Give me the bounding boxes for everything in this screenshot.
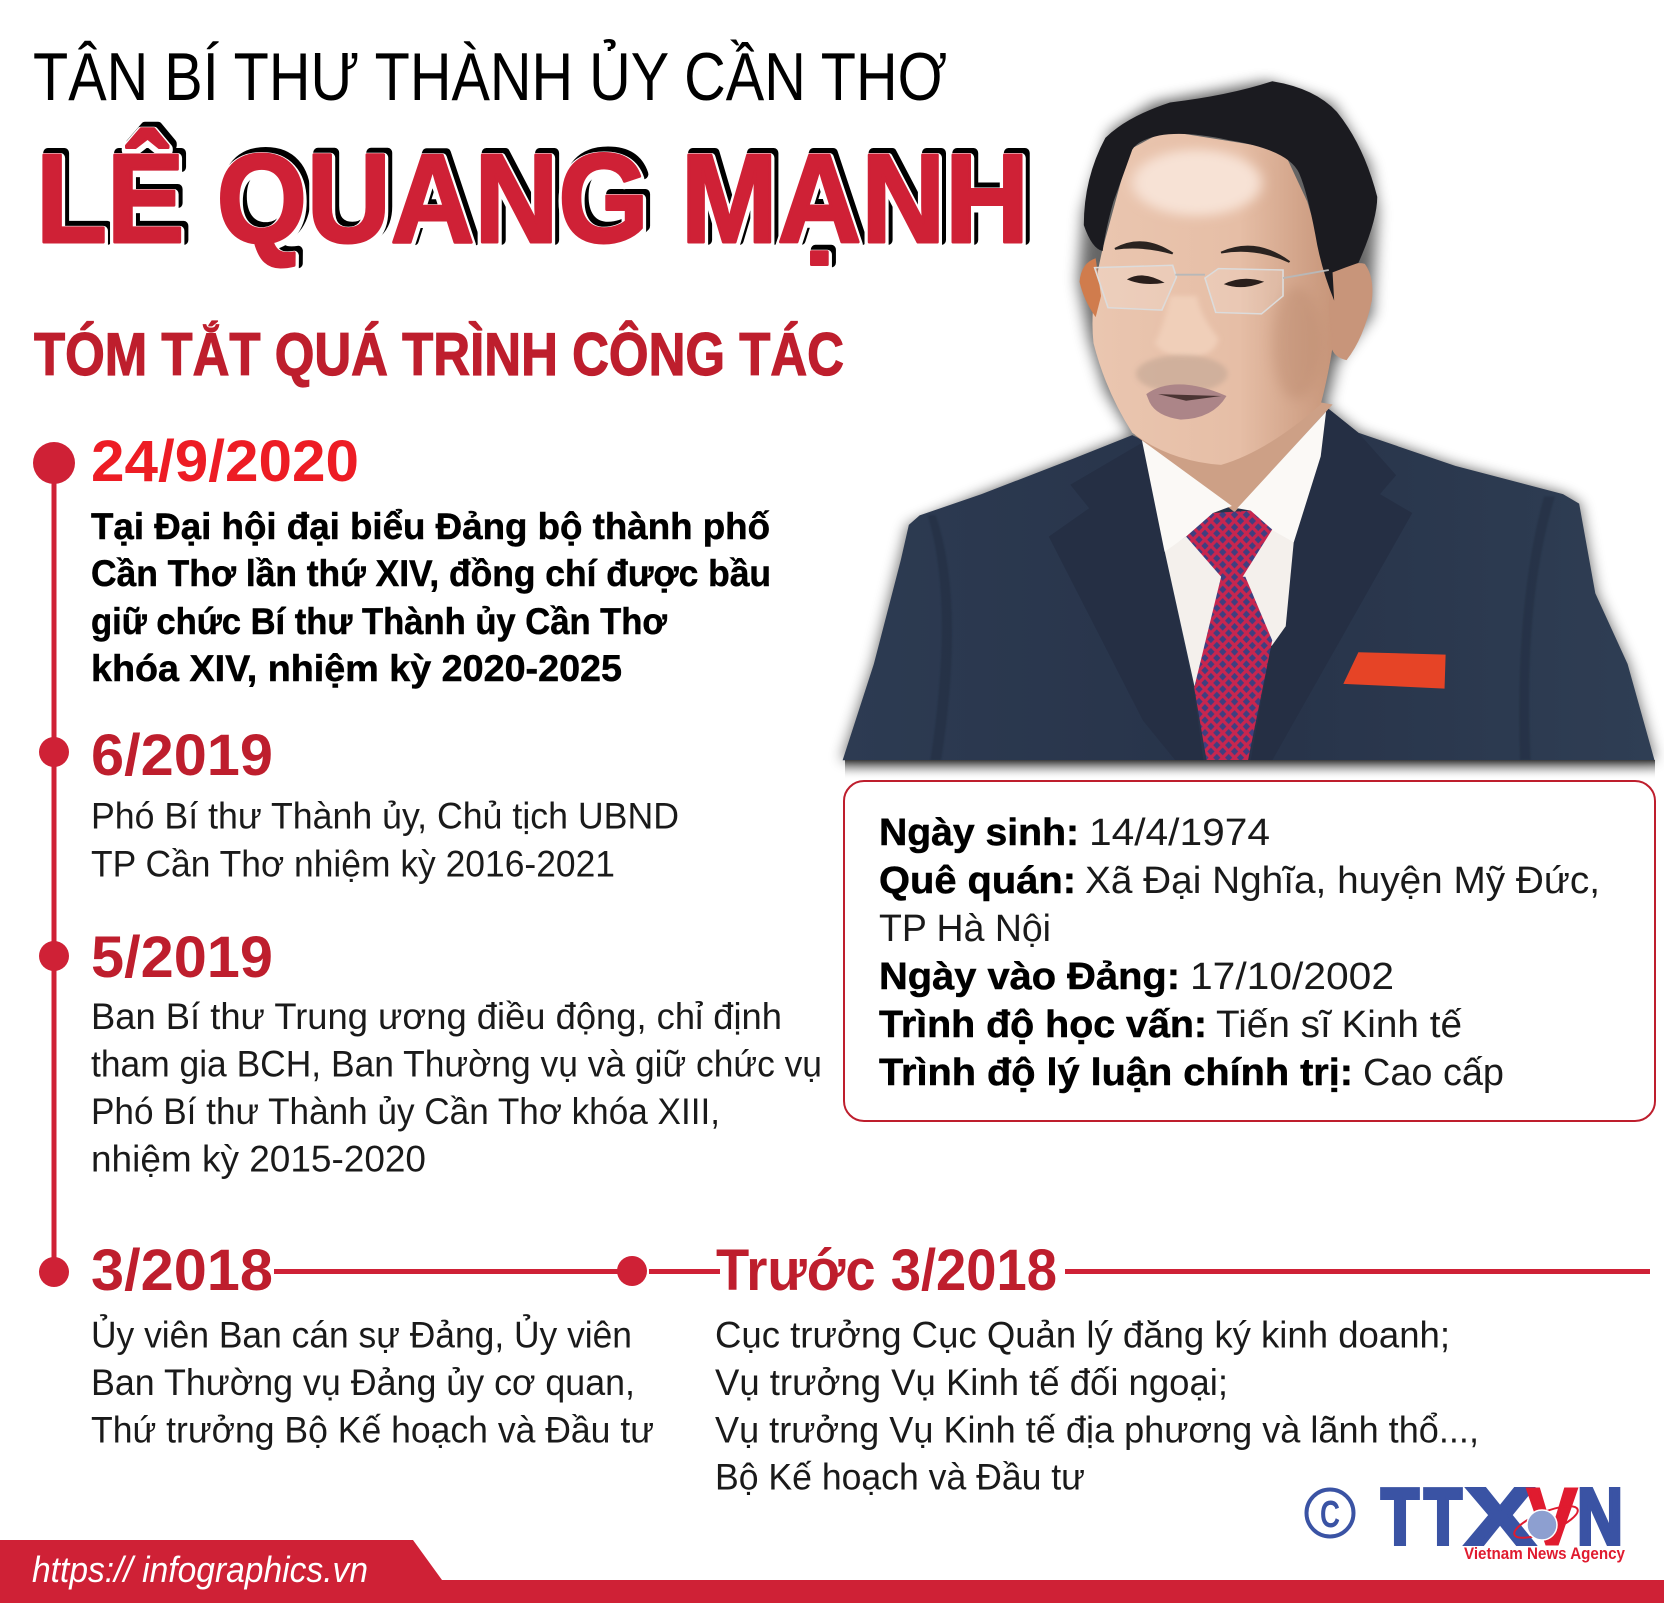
entry 24/9/2020: giữ chức Bí thư Thành ủy Cần Thơ: [91, 601, 668, 642]
entry before 3/2018: Vụ trưởng Vụ Kinh tế địa phương và lãnh thổ...,: [715, 1410, 1479, 1450]
TTXVN logo: T: [1381, 1472, 1419, 1561]
suit: [843, 407, 1655, 760]
info box: 17/10/2002: [1190, 956, 1394, 998]
entry 24/9/2020: [91, 429, 771, 689]
hair: [1084, 81, 1377, 301]
name heading: LÊ QUANG MẠNH: [36, 128, 1029, 269]
entry 24/9/2020: Tại Đại hội đại biểu Đảng bộ thành phố: [91, 506, 770, 547]
eyebrows: [1115, 242, 1289, 262]
nose: [1155, 296, 1218, 357]
entry 3/2018: Ủy viên Ban cán sự Đảng, Ủy viên: [91, 1314, 632, 1356]
timeline dot 5/2019: [39, 941, 69, 971]
forehead highlight: [1132, 150, 1261, 216]
entry 24/9/2020: 24/9/2020: [91, 429, 359, 494]
section heading: TÓM TẮT QUÁ TRÌNH CÔNG TÁC: [34, 321, 844, 388]
info box: Ngày vào Đảng:: [879, 956, 1180, 998]
copyright icon: C: [1320, 1494, 1340, 1536]
entry 5/2019: 5/2019: [91, 925, 273, 990]
badge: [1343, 652, 1446, 689]
photo bottom shadow: [845, 760, 1655, 780]
TTXVN logo: X: [1466, 1472, 1534, 1561]
shirt: [1165, 511, 1294, 697]
info box: Xã Đại Nghĩa, huyện Mỹ Đức,: [1085, 860, 1600, 902]
eyes: [1127, 275, 1264, 287]
mouth: [1146, 384, 1226, 420]
entry before 3/2018: Vụ trưởng Vụ Kinh tế đối ngoại;: [715, 1362, 1228, 1403]
entry 6/2019: Phó Bí thư Thành ủy, Chủ tịch UBND: [91, 796, 679, 836]
timeline dot 2020: [33, 442, 75, 484]
photo shadow: [843, 81, 1655, 760]
neck: [1135, 390, 1333, 512]
glasses: [1095, 265, 1329, 314]
info box: TP Hà Nội: [879, 908, 1051, 950]
face: [1092, 131, 1337, 465]
timeline dot 3/2018: [39, 1257, 69, 1287]
TTXVN logo: Vietnam News Agency: [1464, 1544, 1625, 1563]
entry before 3/2018: Trước 3/2018: [716, 1238, 1057, 1303]
name heading: LÊ QUANG MẠNH: [36, 131, 1029, 272]
entry 24/9/2020: khóa XIV, nhiệm kỳ 2020-2025: [91, 648, 622, 689]
horizontal connector middle: [649, 1269, 720, 1274]
entry 6/2019: 6/2019: [91, 723, 273, 788]
title: TÂN BÍ THƯ THÀNH ỦY CẦN THƠ: [33, 38, 947, 115]
name heading: LÊ QUANG MẠNH: [40, 126, 1033, 267]
TTXVN logo: T: [1424, 1472, 1462, 1561]
entry 3/2018: Thứ trưởng Bộ Kế hoạch và Đầu tư: [91, 1410, 654, 1450]
copyright icon: [1306, 1490, 1354, 1536]
entry 6/2019: [91, 723, 679, 884]
entry before 3/2018: Cục trưởng Cục Quản lý đăng ký kinh doanh;: [715, 1314, 1450, 1356]
entry 5/2019: Ban Bí thư Trung ương điều động, chỉ định: [91, 996, 782, 1037]
entry 3/2018: 3/2018: [91, 1238, 273, 1303]
moustache shade: [1136, 355, 1228, 393]
entry 6/2019: TP Cần Thơ nhiệm kỳ 2016-2021: [91, 844, 615, 884]
info box: [844, 781, 1655, 1121]
entry 5/2019: nhiệm kỳ 2015-2020: [91, 1138, 426, 1180]
entry 3/2018: Ban Thường vụ Đảng ủy cơ quan,: [91, 1362, 635, 1403]
footer band: [0, 1540, 1664, 1603]
necktie: [1186, 511, 1272, 760]
entry 24/9/2020: Cần Thơ lần thứ XIV, đồng chí được bầu: [91, 553, 771, 594]
horizontal dot: [617, 1256, 647, 1286]
info box: Trình độ lý luận chính trị:: [879, 1052, 1353, 1094]
portrait photo: [843, 81, 1655, 760]
entry 3/2018: [91, 1238, 654, 1450]
info box: Ngày sinh:: [879, 812, 1079, 854]
TTXVN logo: V: [1527, 1472, 1577, 1561]
timeline dot 6/2019: [39, 737, 69, 767]
left ear: [1080, 258, 1101, 317]
info box: Trình độ học vấn:: [879, 1004, 1207, 1046]
collar: [1142, 412, 1326, 552]
cheek shade: [1272, 287, 1321, 400]
entry 5/2019: Phó Bí thư Thành ủy Cần Thơ khóa XIII,: [91, 1091, 720, 1132]
info box: Quê quán:: [879, 860, 1076, 902]
info box: Cao cấp: [1363, 1052, 1504, 1094]
TTXVN logo: [1381, 1472, 1625, 1563]
entry before 3/2018: Bộ Kế hoạch và Đầu tư: [715, 1456, 1085, 1498]
TTXVN logo: N: [1577, 1472, 1623, 1561]
horizontal connector right: [1065, 1269, 1650, 1274]
suit shadow folds: [928, 497, 1555, 760]
entry 5/2019: tham gia BCH, Ban Thường vụ và giữ chức vụ: [91, 1044, 822, 1084]
info box: Tiến sĩ Kinh tế: [1216, 1004, 1462, 1046]
entry before 3/2018: [715, 1238, 1479, 1498]
info box: 14/4/1974: [1089, 812, 1270, 854]
right ear: [1329, 263, 1372, 360]
footer url: https:// infographics.vn: [32, 1549, 368, 1590]
horizontal connector left: [274, 1269, 618, 1274]
timeline line: [52, 463, 56, 1272]
entry 5/2019: [91, 925, 822, 1180]
suit lapels: [1049, 407, 1412, 760]
